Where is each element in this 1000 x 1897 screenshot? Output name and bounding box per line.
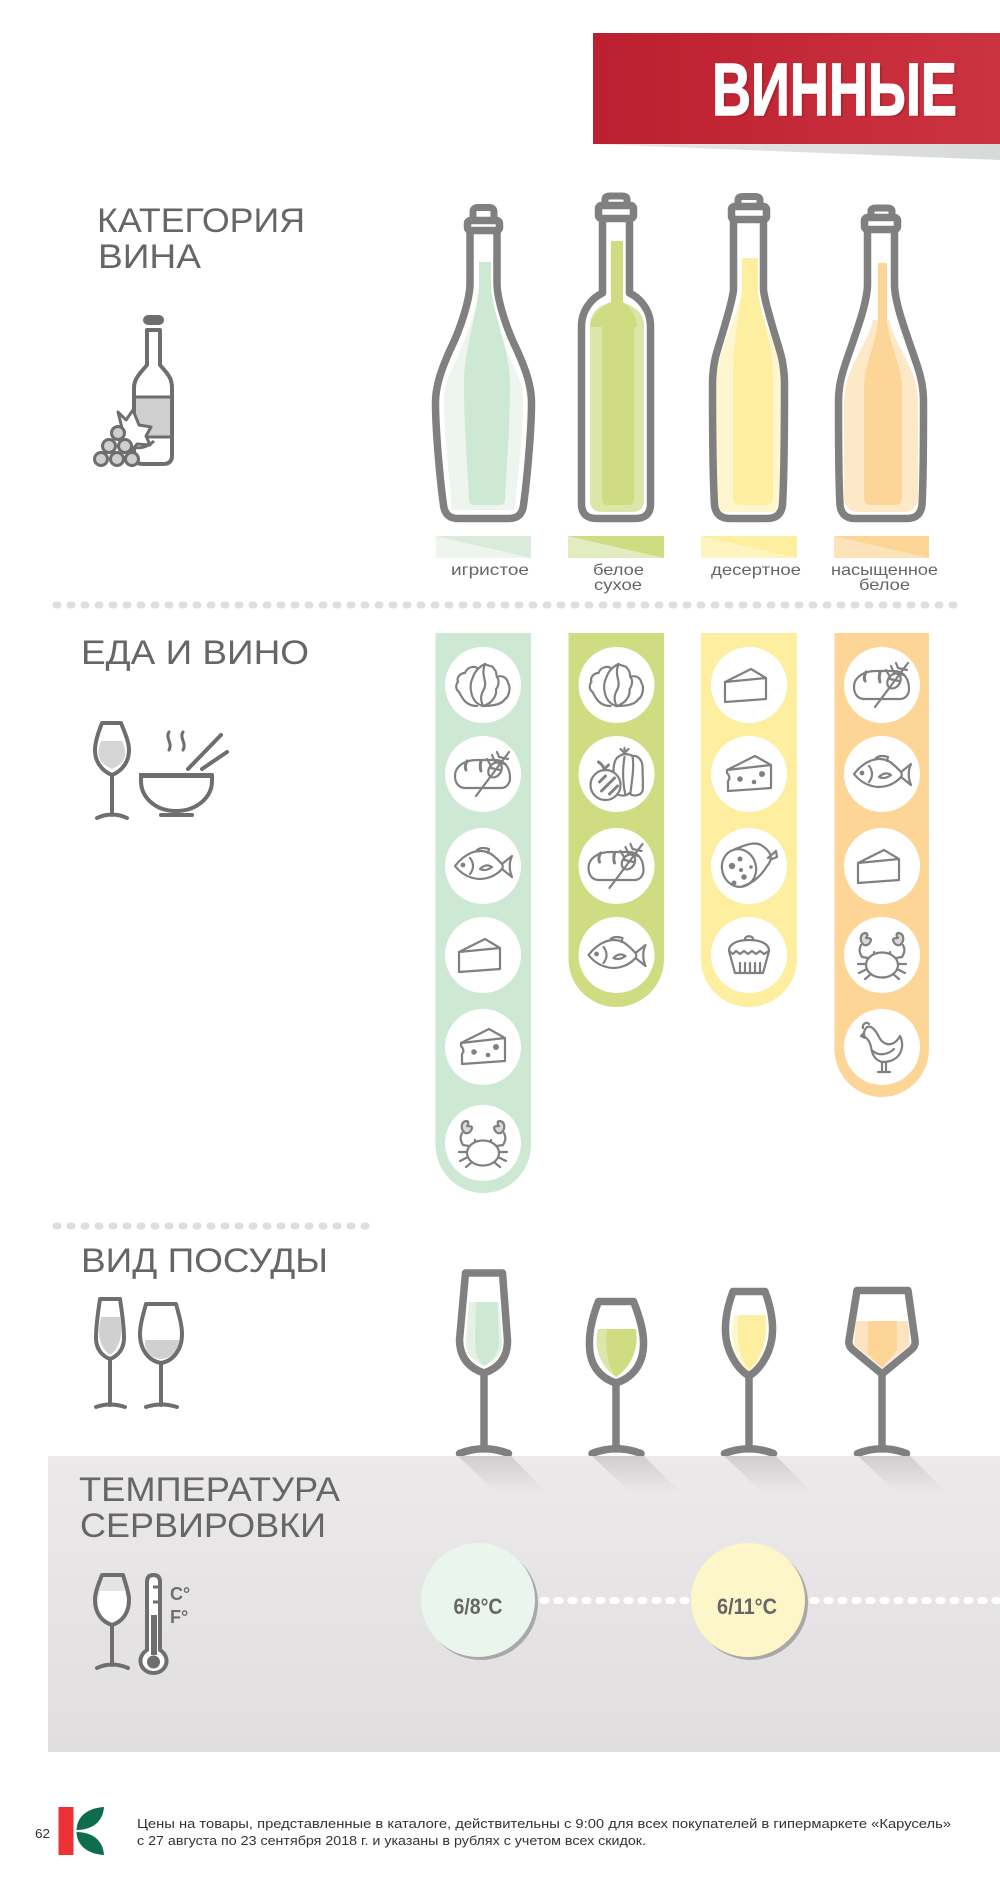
glass: sparkling [460,1273,508,1454]
footer note: Цены на товары, представленные в каталоге, действительны с 9:00 для всех покупателей в гипермаркете «Карусель» [137,1816,951,1831]
icon: glass and thermometer: F° [170,1607,188,1627]
footer note: с 27 августа по 23 сентября 2018 г. и указаны в рублях с учетом всех скидок. [137,1833,646,1848]
heading: wine category: КАТЕГОРИЯ [97,202,305,240]
heading: glassware: ВИД ПОСУДЫ [81,1242,328,1280]
category labels [451,562,938,594]
bottle: rich white [838,208,924,518]
temperature badge: 6/11 [691,1543,808,1660]
food icons: cheese, cheese with holes, salami, cupcake [718,669,777,973]
heading: wine category [97,202,305,276]
temperature badge: 6/8 [421,1543,538,1660]
icon: two glasses [96,1299,182,1407]
food icons: lettuce, vegetables, bread, fish [588,664,646,968]
food column: sparkling [436,633,531,1193]
category labels: десертное [711,562,801,579]
food column: dessert [701,633,797,1007]
header banner [593,33,1000,160]
food icons: lettuce, bread, fish, cheese, cheese with holes, crab [455,664,512,1167]
heading: food and wine: ЕДА И ВИНО [81,634,309,672]
page number: 62 [35,1826,50,1841]
glass: dessert [724,1292,774,1454]
category labels: насыщенное [831,562,938,579]
temperature panel [48,1456,1000,1752]
glass base shadows [458,1456,946,1492]
icon: glass and thermometer: C° [170,1584,190,1604]
category labels: белое [593,562,644,579]
icon: wine bottle with grapes [94,315,172,466]
temperature badge: 6/8: 6/8°C [454,1594,503,1619]
footer note [137,1816,951,1848]
heading: serving temperature: ТЕМПЕРАТУРА [79,1471,340,1509]
bottle: sparkling [436,208,532,518]
glass: dry white [589,1302,644,1454]
food icons: bread, fish, cheese, crab, hen [854,663,911,1072]
glass: rich white [849,1290,915,1454]
icon: glass and thermometer [95,1575,190,1673]
category labels: игристое [451,562,529,579]
heading: serving temperature [79,1471,340,1545]
heading: serving temperature: СЕРВИРОВКИ [80,1507,326,1545]
icon: wine glass and bowl [95,723,227,818]
food column: rich white [834,633,929,1097]
legend swatches [436,536,929,558]
food column: dry white [568,633,664,1007]
heading: wine category: ВИНА [98,238,201,276]
logo [58,1807,104,1855]
bottle: dessert [712,196,784,518]
temperature badge: 6/11: 6/11°C [717,1594,777,1619]
category labels: сухое [594,577,642,594]
bottle: dry white [582,196,650,518]
category labels: белое [859,577,910,594]
